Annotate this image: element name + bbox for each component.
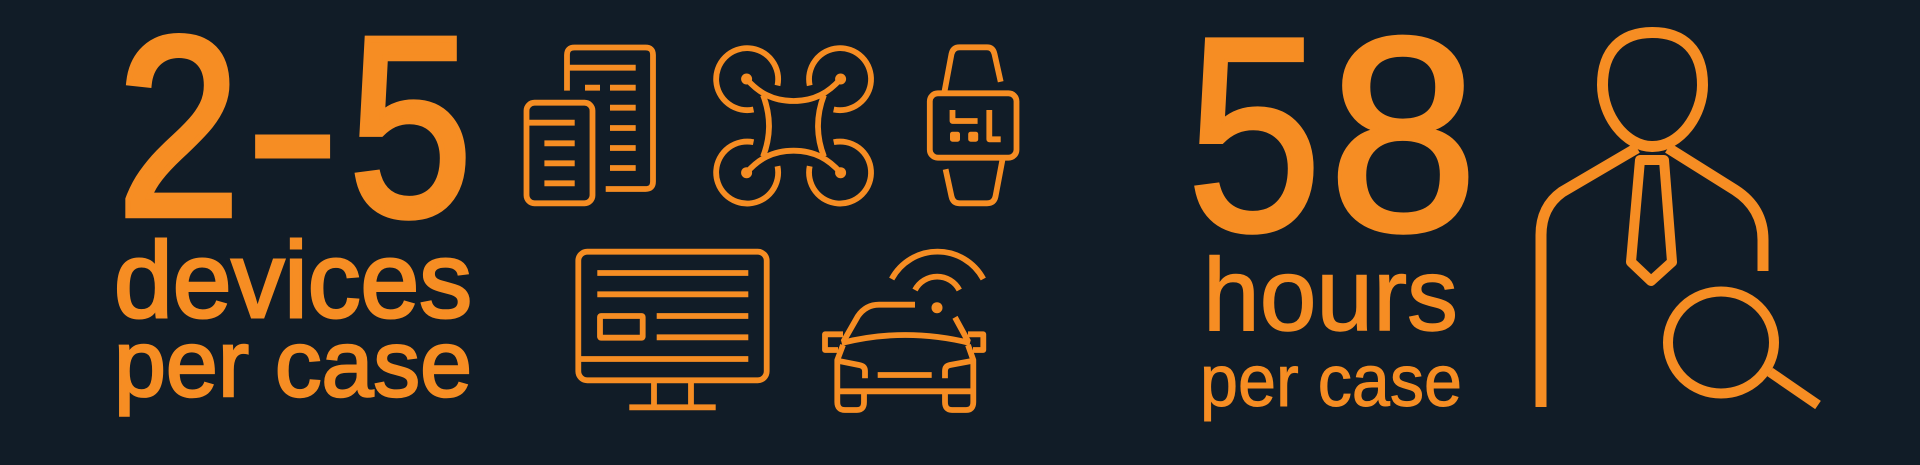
icon: smartwatch <box>930 47 1016 203</box>
label: per case: per case <box>1200 341 1462 422</box>
big number: 2-5 <box>117 0 472 294</box>
big number: 58 <box>1186 0 1478 289</box>
label: devices: devices <box>114 219 472 340</box>
icon: drone <box>716 48 871 204</box>
statistic: 2-5 devices per case <box>114 0 472 417</box>
magnifier <box>1668 292 1774 394</box>
label: hours: hours <box>1203 237 1458 352</box>
head <box>1602 32 1702 146</box>
statistic: 58 hours per case <box>1186 0 1478 422</box>
icon: connected car <box>825 252 983 410</box>
tie <box>1631 160 1672 281</box>
shoulders <box>1541 148 1763 407</box>
icon: person with magnifier <box>1541 32 1818 407</box>
icon: documents <box>526 48 653 203</box>
icon: desktop monitor <box>578 252 767 407</box>
label: per case: per case <box>114 311 472 417</box>
